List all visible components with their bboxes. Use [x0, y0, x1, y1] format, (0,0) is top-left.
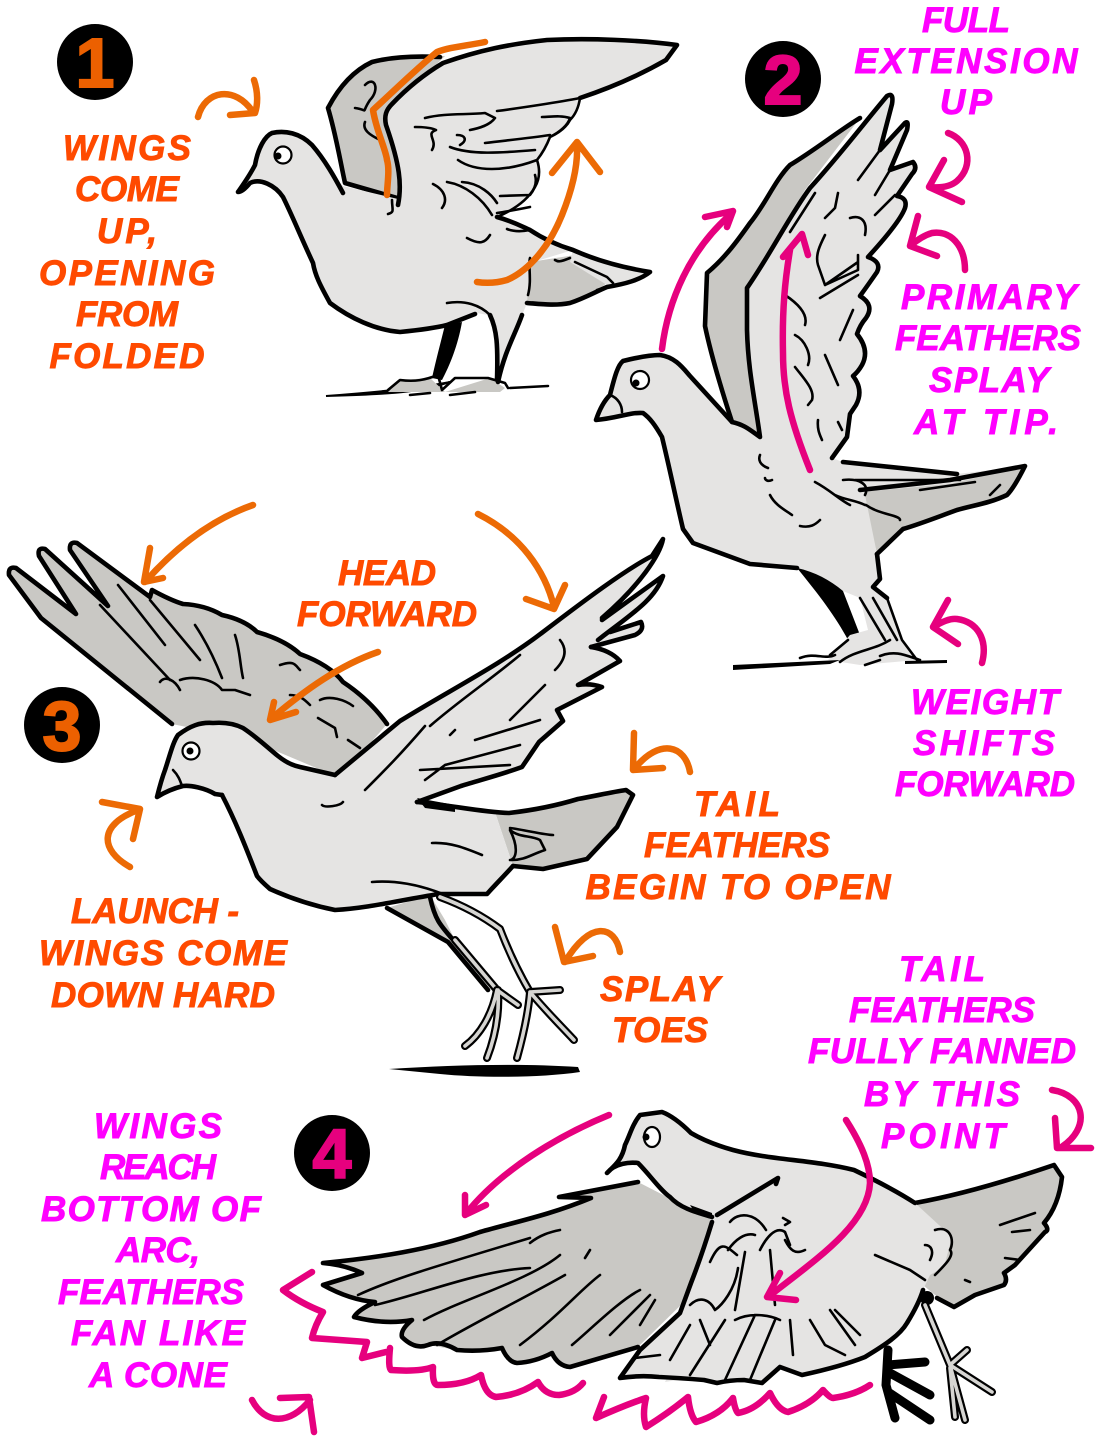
badge: number 4 — [294, 1115, 370, 1193]
arrow: wing arm outline — [373, 42, 485, 195]
text: head forward: FORWARD — [297, 595, 477, 634]
text: wings come up: OPENING — [39, 254, 215, 293]
arrow: left wing coming down — [144, 505, 253, 582]
badge: number 3 — [24, 687, 100, 765]
text: tail feathers fully fanned: POINT — [881, 1117, 1008, 1156]
text: wings come up: WINGS — [63, 129, 191, 168]
illustration: pigeon launching, wings coming down — [9, 539, 663, 1077]
text: full extension up: UP — [940, 83, 993, 122]
text: splay toes — [600, 970, 723, 1050]
text: wings reach bottom of arc: FEATHERS — [58, 1273, 244, 1312]
text: wings come up: FROM — [76, 295, 179, 334]
illustration: pigeon with wings at bottom of arc — [323, 1112, 1062, 1420]
text: full extension up — [854, 1, 1078, 122]
text: wings come up: FOLDED — [50, 337, 204, 376]
arrow: curved arrow to wing tip — [910, 216, 965, 270]
text: wings reach bottom of arc: ARC, — [115, 1231, 200, 1270]
text: launch, wings come down hard — [39, 892, 289, 1015]
text: tail feathers begin to open: TAIL — [694, 785, 780, 824]
arrow: wing cone — [252, 1397, 314, 1432]
arrow: wing rising — [662, 211, 733, 349]
text: launch, wings come down hard: LAUNCH - — [71, 892, 239, 931]
panel: step 3 — [9, 505, 891, 1077]
panel: step 2 — [596, 1, 1081, 804]
arrow: launch — [102, 802, 140, 867]
text: wings reach bottom of arc: WINGS — [94, 1107, 222, 1146]
text: primary feathers splay: PRIMARY — [901, 278, 1080, 317]
arrow: wing extending up — [783, 234, 810, 470]
squiggle: right motion line — [596, 1385, 870, 1427]
text: primary feathers splay: SPLAY — [929, 361, 1052, 400]
badge: number 2: 2 — [764, 41, 802, 119]
text: tail feathers begin to open: BEGIN TO OPEN — [586, 868, 891, 907]
text: tail feathers fully fanned — [808, 950, 1076, 1156]
text: wings come up — [39, 129, 215, 376]
arrow: right wing coming down — [478, 514, 565, 609]
illustration: pigeon with wings coming up — [238, 39, 677, 396]
text: full extension up: EXTENSION — [854, 42, 1078, 81]
text: head forward: HEAD — [338, 554, 436, 593]
text: tail feathers fully fanned: FULLY FANNED — [808, 1032, 1076, 1071]
text: head forward — [297, 554, 477, 634]
text: primary feathers splay: FEATHERS — [895, 319, 1081, 358]
arrow: top curved arrow — [929, 133, 967, 202]
text: launch, wings come down hard: WINGS COME — [39, 934, 289, 973]
text: wings come up: COME — [75, 170, 181, 209]
badge: number 3: 3 — [43, 687, 81, 765]
arrow: tail feathers — [633, 733, 690, 772]
panel: step 1 — [39, 24, 677, 396]
arrow: splay toes — [555, 927, 620, 962]
text: tail feathers fully fanned: TAIL — [899, 950, 985, 989]
arrow: head forward — [270, 652, 378, 720]
badge: number 1 — [57, 24, 133, 102]
arrow: small curved arrow toward head — [198, 80, 257, 117]
arrow: upward wing motion — [477, 142, 600, 283]
text: primary feathers splay: AT TIP. — [913, 403, 1058, 442]
badge: number 4: 4 — [313, 1115, 352, 1193]
illustration: pigeon with wings at full extension — [596, 95, 1025, 670]
text: weight shifts forward — [895, 683, 1075, 804]
text: weight shifts forward: FORWARD — [895, 765, 1075, 804]
panel: step 4 — [41, 950, 1091, 1432]
text: wings reach bottom of arc: BOTTOM OF — [41, 1190, 263, 1229]
arrow: weight shift — [933, 600, 984, 663]
text: tail feathers begin to open: FEATHERS — [644, 826, 830, 865]
text: wings reach bottom of arc: FAN LIKE — [71, 1314, 247, 1353]
text: weight shifts forward: WEIGHT — [911, 683, 1062, 722]
text: wings come up: UP, — [97, 212, 157, 251]
squiggle: left motion line — [283, 1272, 583, 1397]
arrow: wing folding inward — [767, 1120, 870, 1300]
text: tail feathers fully fanned: BY THIS — [864, 1075, 1020, 1114]
text: splay toes: TOES — [612, 1011, 708, 1050]
arrow: wing sweeping down — [465, 1115, 609, 1215]
text: launch, wings come down hard: DOWN HARD — [51, 976, 275, 1015]
badge: number 1: 1 — [76, 24, 114, 102]
text: weight shifts forward: SHIFTS — [913, 724, 1055, 763]
badge: number 2 — [745, 41, 821, 119]
text: wings reach bottom of arc: REACH — [100, 1148, 217, 1187]
text: primary feathers splay — [895, 278, 1081, 442]
text: splay toes: SPLAY — [600, 970, 723, 1009]
text: tail feathers begin to open — [586, 785, 891, 907]
text: full extension up: FULL — [922, 1, 1010, 40]
arrow: tail feathers — [1052, 1090, 1091, 1148]
text: tail feathers fully fanned: FEATHERS — [849, 991, 1035, 1030]
text: wings reach bottom of arc — [41, 1107, 263, 1395]
text: wings reach bottom of arc: A CONE — [88, 1356, 229, 1395]
